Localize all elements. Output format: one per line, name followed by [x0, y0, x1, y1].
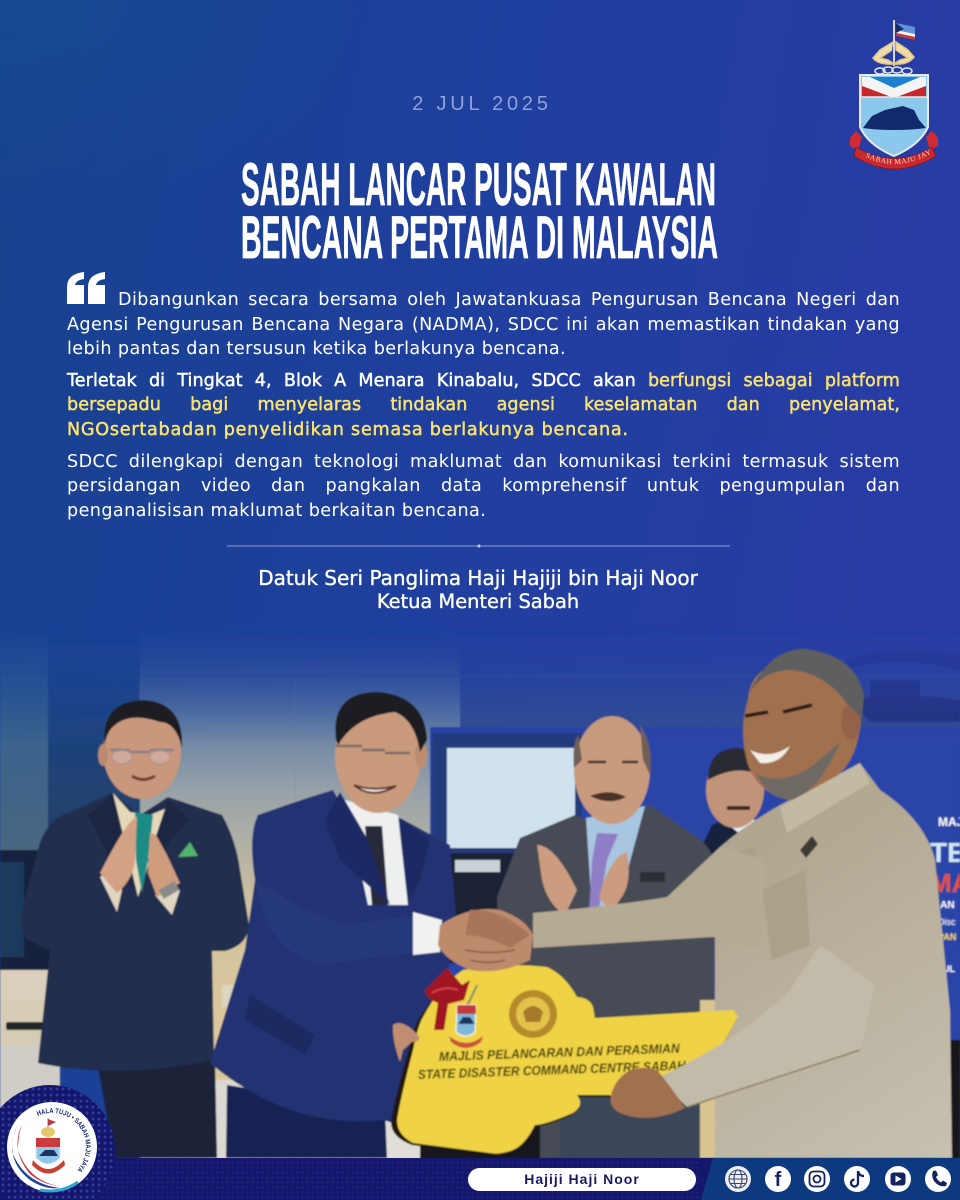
room background: [0, 620, 960, 1160]
room background: LAN: [934, 900, 955, 911]
paragraph 1: Agensi Pengurusan Bencana Negara (NADMA), SDCC ini akan memastikan tindakan yang: [67, 315, 900, 335]
title: [241, 151, 718, 271]
seal on key: [509, 990, 557, 1038]
wreath: [875, 67, 912, 74]
room background: Disc: [938, 917, 956, 927]
icon: website: [725, 1166, 751, 1192]
arms: [873, 42, 914, 64]
motto ribbon: [850, 131, 938, 170]
name pill: Hajiji Haji Noor: [524, 1171, 640, 1187]
footer bar: [0, 1158, 960, 1200]
paragraph 1: Dibangunkan secara bersama oleh Jawatankuasa Pengurusan Bencana Negeri dan: [118, 290, 900, 310]
paragraph 3: penganalisisan maklumat berkaitan bencana.: [67, 501, 486, 521]
paragraph 2 with highlight: [66, 371, 900, 440]
paragraph 2 with highlight: bersepadu bagi menyelaras tindakan agensi keselamatan dan penyelamat,: [67, 395, 900, 415]
key inscription: [418, 1041, 687, 1082]
flag: [894, 20, 915, 66]
icon: facebook: f: [775, 1169, 782, 1191]
paragraph 1: lebih pantas dan tersusun ketika berlakunya bencana.: [67, 339, 566, 359]
attribution: Datuk Seri Panglima Haji Hajiji bin Haji Noor: [258, 566, 698, 590]
badge: Hala Tuju logo: [0, 1085, 115, 1198]
icon: facebook: [765, 1166, 791, 1192]
date: 2 JUL 2025: [412, 93, 552, 115]
paragraph 2 with highlight: NGOsertabadan penyelidikan semasa berlakunya bencana.: [67, 420, 629, 440]
paragraph 2 with highlight: Terletak di Tingkat 4, Blok A Menara Kinabalu, SDCC akan berfungsi sebagai platform: [67, 371, 900, 391]
room background: PAN: [938, 932, 956, 942]
shield: [860, 75, 928, 156]
attribution: Ketua Menteri Sabah: [377, 590, 579, 613]
red ribbon bow: [425, 968, 470, 1030]
room background: JUL: [938, 964, 956, 974]
paragraph 3: SDCC dilengkapi dengan teknologi maklumat dan komunikasi terkini termasuk sistem: [67, 452, 900, 472]
icon: quotation mark: [67, 272, 105, 304]
icon: video: [885, 1166, 911, 1192]
giant yellow key: [391, 965, 738, 1156]
person: right-centre man in grey suit: [497, 716, 716, 1158]
crest on key: [449, 985, 483, 1048]
key inscription: MAJLIS PELANCARAN DAN PERASMIAN: [439, 1041, 681, 1064]
person: left man clapping: [21, 700, 249, 1158]
name pill: [468, 1168, 696, 1191]
paragraph 3: persidangan video dan pangkalan data komprehensif untuk pengumpulan dan: [67, 476, 900, 496]
crest: Sabah coat of arms: [850, 20, 938, 170]
attribution: [258, 566, 698, 613]
paragraph 1: [67, 290, 900, 359]
divider: [227, 544, 730, 548]
icon: phone: [925, 1166, 951, 1192]
paragraph 3: [67, 452, 900, 521]
badge: Hala Tuju logo: HALA TUJU • SABAH MAJU JAYA: [36, 1108, 91, 1172]
khaki sleeve and hand holding key: [611, 945, 875, 1118]
icon: instagram: [804, 1166, 830, 1192]
screen portrait: [700, 748, 770, 870]
person: right man in khaki shirt: [533, 649, 952, 1158]
person: centre man in blue suit: [210, 692, 456, 1158]
handshake: [438, 909, 533, 971]
badge crest: [32, 1118, 65, 1174]
photo: launch ceremony: [0, 620, 960, 1160]
key inscription: STATE DISASTER COMMAND CENTRE SABAH: [418, 1058, 687, 1082]
hand on key: [393, 1023, 419, 1062]
icon: tiktok: [844, 1166, 870, 1192]
